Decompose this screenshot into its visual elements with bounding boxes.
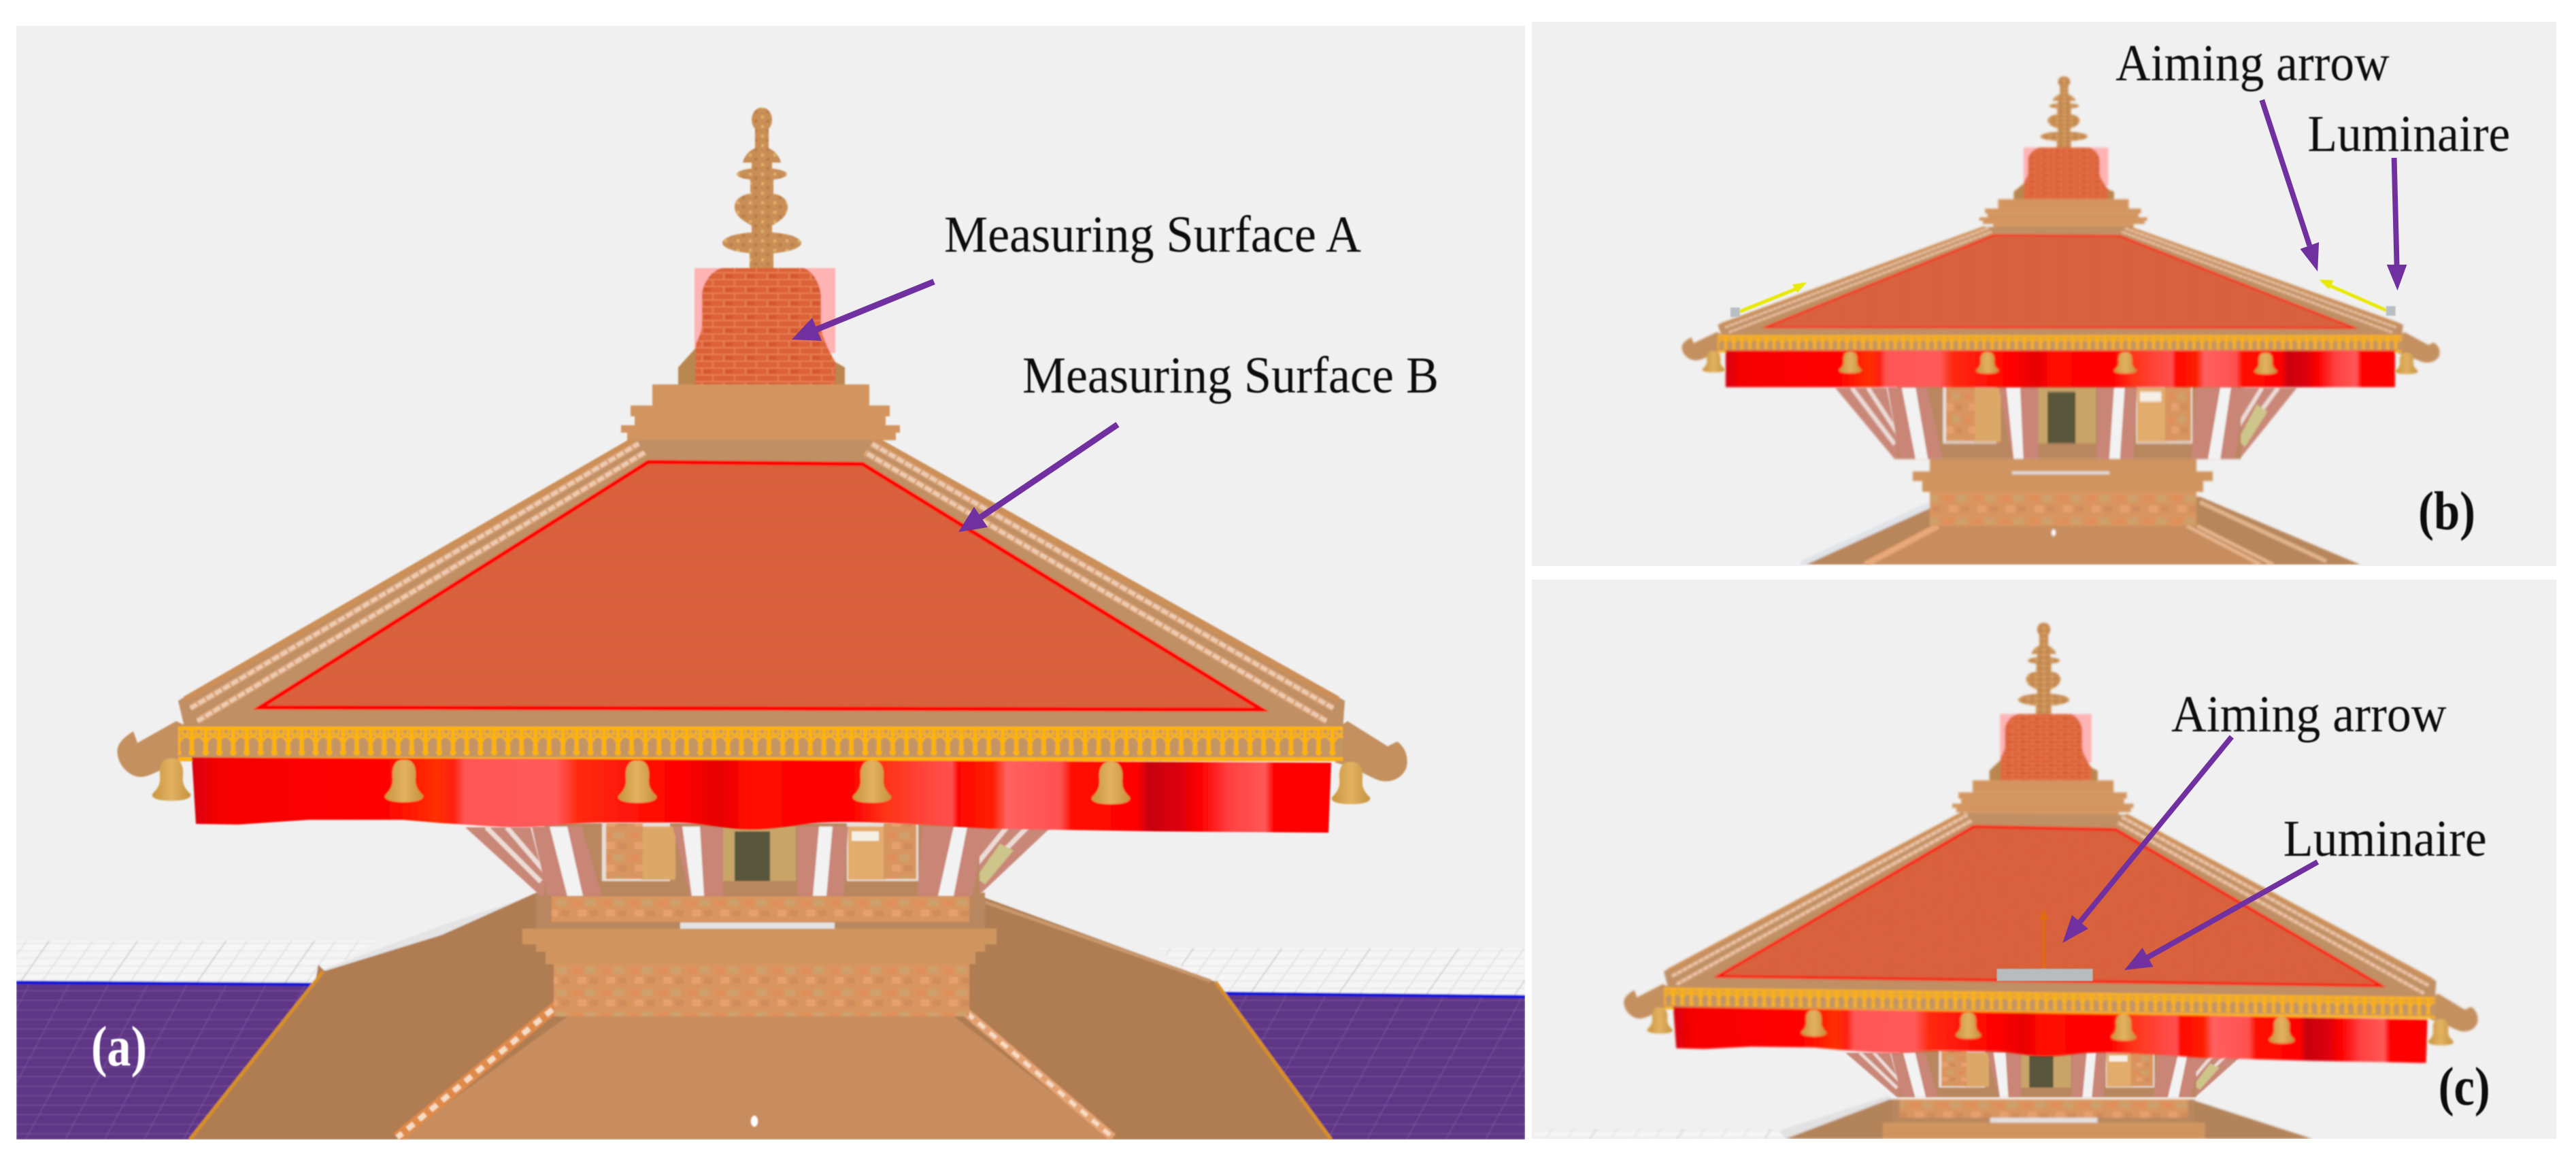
- label: Luminaire: Luminaire: [2307, 106, 2510, 163]
- lower platform: [1799, 457, 2360, 566]
- arrow: aiming arrow pointer: [2262, 100, 2319, 271]
- luminaires and yellow aiming arrows: [1730, 280, 2396, 317]
- temple columns and door: [465, 823, 1051, 896]
- label: Luminaire: Luminaire: [2284, 811, 2487, 867]
- arrow: luminaire pointer: [2387, 158, 2407, 290]
- temple columns and door: [1845, 1050, 2245, 1097]
- arrow: to Measuring Surface B: [958, 425, 1118, 532]
- lower platform: [1535, 1095, 2312, 1139]
- temple roof, finial and curtain: [117, 107, 1407, 833]
- temple roof, finial and curtain: [1682, 76, 2440, 387]
- arrow: aiming arrow pointer: [2062, 737, 2232, 943]
- temple roof, finial and curtain: [1622, 622, 2478, 1063]
- luminaire with orange aiming arrow: [1997, 909, 2093, 981]
- ground grid and purple plane: [16, 891, 1525, 1140]
- panel: (c) floodlight on lower roof edge: [1532, 580, 2556, 1139]
- panel: (a) main temple view: [16, 26, 1525, 1140]
- arrow: luminaire pointer: [2124, 862, 2318, 970]
- panel letter (a): (a): [91, 1015, 147, 1078]
- panel letter (b): (b): [2418, 482, 2475, 542]
- arrow: to Measuring Surface A: [792, 282, 934, 341]
- panel letter (c): (c): [2439, 1057, 2490, 1117]
- label: Aiming arrow: Aiming arrow: [2171, 686, 2447, 743]
- label: Measuring Surface A: Measuring Surface A: [944, 206, 1361, 263]
- lower platform: [190, 891, 1331, 1140]
- panel: (b) luminaires at roof corners: [1532, 22, 2556, 566]
- label: Measuring Surface B: Measuring Surface B: [1022, 347, 1439, 404]
- temple columns and door: [1835, 383, 2297, 459]
- label: Aiming arrow: Aiming arrow: [2115, 35, 2390, 92]
